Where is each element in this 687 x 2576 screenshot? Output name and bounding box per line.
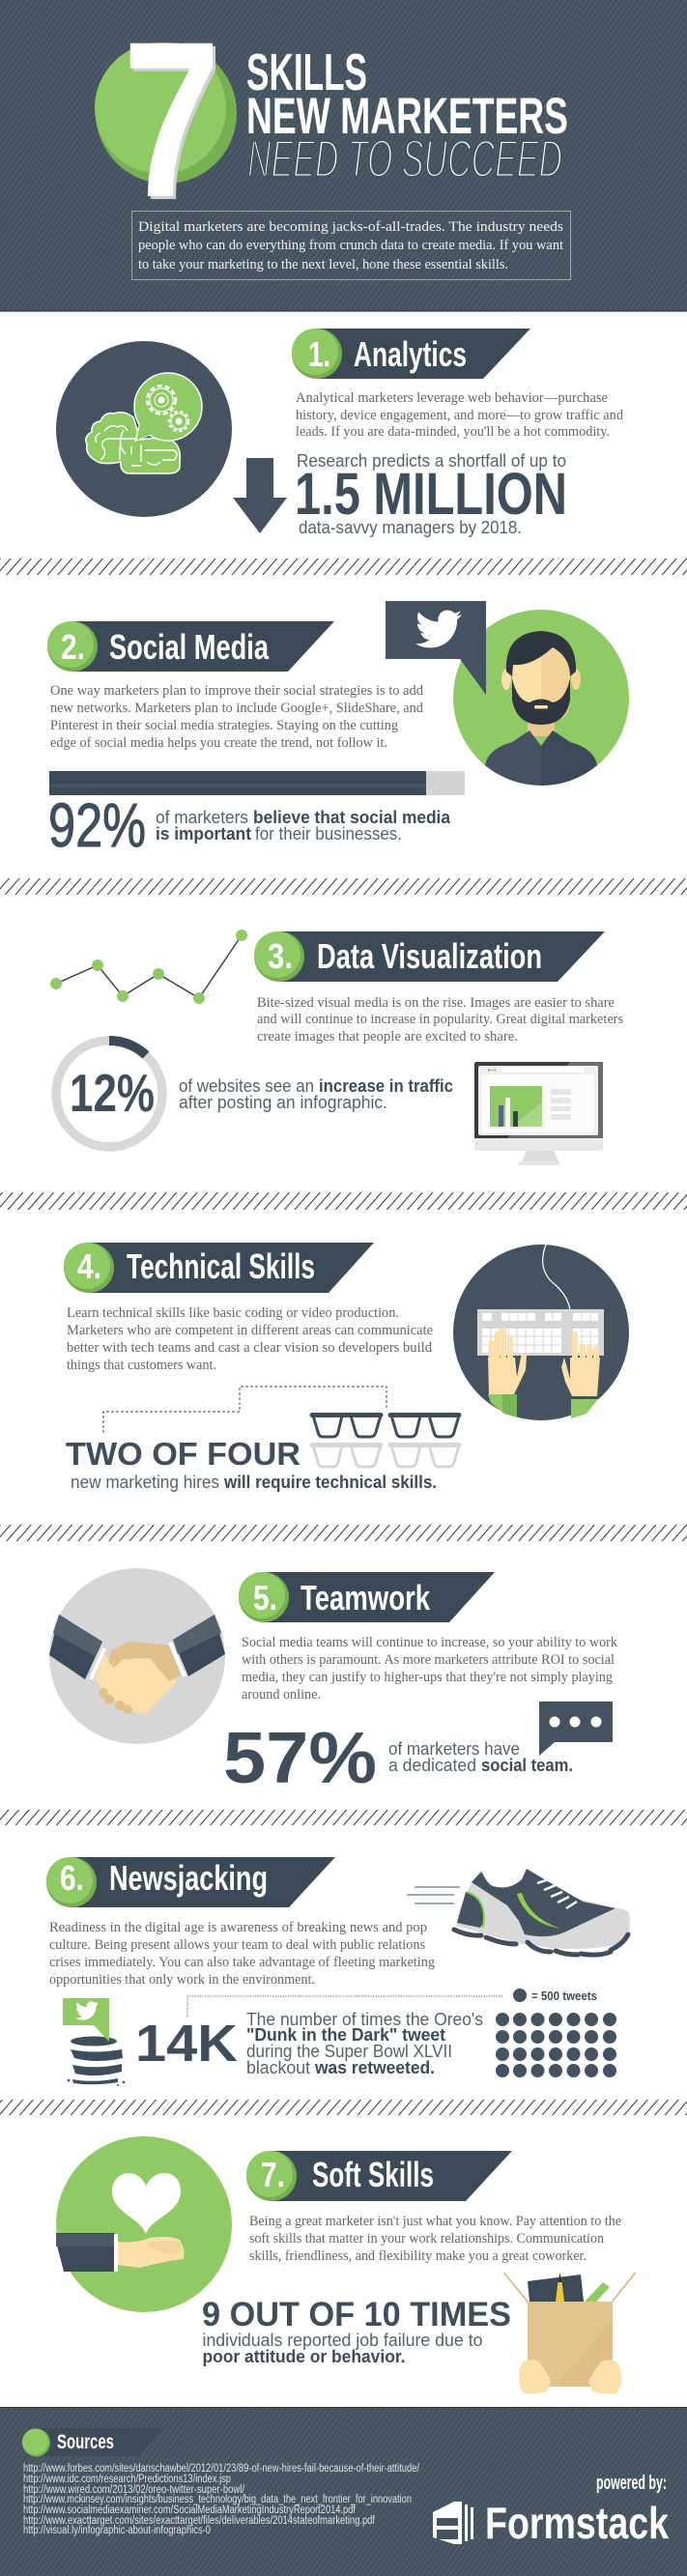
body text: culture. Being present allows your team to deal with public relations	[49, 1937, 425, 1953]
panel: 6 newsjacking	[46, 1857, 630, 2086]
source links: http://www.wired.com/2013/02/oreo-twitter-super-bowl/	[23, 2484, 245, 2496]
intro text box	[131, 211, 570, 280]
stat: 92 percent: believe that social media	[253, 808, 451, 827]
heading banner: newsjacking	[46, 1857, 335, 1907]
panel: 7 soft skills	[56, 2136, 636, 2394]
stat: 14K: blackout	[246, 2058, 310, 2077]
body text: crises immediately. You can also take advantage of fleeting marketing	[49, 1955, 435, 1970]
progress bar 92 percent	[49, 771, 465, 795]
heading banner: data visualization	[254, 931, 605, 982]
body text: new networks. Marketers plan to include Google+, SlideShare, and	[50, 701, 424, 716]
icon: twitter speech bubble	[386, 601, 486, 695]
icon: oreo cookie stack with twitter bubble	[63, 1998, 125, 2086]
body text: Being a great marketer isn't just what you know. Pay attention to the	[249, 2214, 621, 2229]
body text	[249, 2214, 621, 2264]
stat: 92 percent	[48, 790, 451, 860]
stat: 9 out of 10 times	[202, 2296, 511, 2366]
body text: around online.	[242, 1687, 321, 1703]
dotted connector	[187, 1996, 503, 2017]
big numeral seven: 7	[123, 0, 220, 243]
heading banner: social media: 2.	[61, 627, 85, 667]
chart: donut 12 percent	[56, 1041, 162, 1147]
stat text: increase in traffic: increase in traffic	[319, 1076, 453, 1096]
icon: hand holding heart	[56, 2136, 232, 2312]
heading banner: technical skills: Technical Skills	[127, 1246, 315, 1286]
sources heading: Sources	[57, 2431, 114, 2453]
heading banner: analytics	[292, 329, 530, 379]
panel: 3 data visualization	[50, 930, 623, 1165]
panel: 2 social media	[47, 601, 629, 860]
stat text: increase in traffic: of websites see an	[179, 1076, 314, 1096]
stat: 14K: was retweeted.	[314, 2058, 435, 2077]
title: SKILLS	[246, 43, 367, 101]
intro text box: to take your marketing to the next level, hone these essential skills.	[138, 257, 508, 272]
stat: 9 out of 10 times: individuals reported job failure due to	[203, 2331, 483, 2350]
heading banner: technical skills: 4.	[77, 1246, 101, 1286]
panel: header	[0, 0, 687, 312]
stat: 1.5 million: 1.5 MILLION	[295, 461, 567, 527]
stat: 92 percent: for their businesses.	[255, 824, 402, 844]
heading banner: soft skills: 7.	[261, 2155, 285, 2194]
heading banner: teamwork	[239, 1572, 495, 1622]
heading banner: analytics: Analytics	[354, 334, 467, 374]
heading banner: social media: Social Media	[109, 627, 270, 667]
body text: skills, friendliness, and flexibility make you a great coworker.	[249, 2248, 587, 2264]
stat: two of four	[66, 1436, 437, 1492]
body text	[49, 1920, 435, 1988]
heading banner: soft skills: Soft Skills	[312, 2155, 434, 2194]
body text: and will continue to increase in popularity. Great digital marketers	[257, 1012, 623, 1027]
icon: brain with gears	[56, 341, 232, 517]
icon: green circle behind seven	[95, 43, 237, 184]
stat text: increase in traffic: after posting an infographic.	[179, 1093, 387, 1112]
source links: http://visual.ly/infographic-about-infographics-0	[23, 2525, 211, 2536]
body text	[242, 1635, 618, 1703]
dashed connector	[103, 1387, 386, 1433]
heading banner: teamwork: 5.	[253, 1578, 277, 1617]
icon: down arrow	[233, 458, 287, 533]
stat: 57 percent: of marketers have	[388, 1739, 520, 1759]
heading banner: social media	[47, 621, 334, 672]
body text: opportunities that only work in the environment.	[49, 1972, 315, 1988]
panel: 5 teamwork	[49, 1568, 618, 1798]
body text	[296, 390, 624, 440]
body text: media, they can justify to higher-ups that they're not simply playing	[242, 1670, 613, 1685]
body text: Pinterest in their social media strategies. Staying on the cutting	[50, 718, 398, 733]
icon: running shoe	[407, 1869, 630, 1955]
stat: two of four: TWO OF FOUR	[66, 1436, 301, 1472]
body text: create images that people are excited to share.	[257, 1029, 518, 1045]
source links: http://www.idc.com/research/Predictions13/index.jsp	[23, 2474, 231, 2485]
stat: two of four: will require technical skills.	[223, 1473, 437, 1492]
body text: Learn technical skills like basic coding or video production.	[67, 1305, 399, 1321]
body text: Analytical marketers leverage web behavior—purchase	[296, 390, 608, 406]
body text: leads. If you are data-minded, you'll be a hot commodity.	[296, 424, 610, 440]
heading banner: technical skills	[64, 1243, 374, 1293]
stat: 1.5 million: Research predicts a shortfall of up to	[297, 451, 566, 471]
body text: One way marketers plan to improve their social strategies is to add	[50, 683, 424, 699]
body text	[257, 995, 623, 1045]
stat: 92 percent: is important	[156, 824, 251, 844]
body text: Marketers who are competent in different areas can communicate	[67, 1323, 433, 1338]
stat: 9 out of 10 times: poor attitude or behavior.	[203, 2347, 406, 2366]
heading banner: teamwork: Teamwork	[301, 1578, 431, 1617]
chart: line chart icon	[50, 930, 247, 1004]
heading banner: analytics: 1.	[308, 334, 330, 374]
body text: edge of social media helps you create the trend, not follow it.	[50, 735, 387, 751]
source links: http://www.forbes.com/sites/danschawbel/2012/01/23/89-of-new-hires-fail-because-of-their-attitude/	[23, 2463, 420, 2475]
icon: hands on keyboard	[453, 1245, 629, 1420]
stat: 14K: during the Super Bowl XLVII	[246, 2042, 452, 2061]
intro text box: people who can do everything from crunch data to create media. If you want	[138, 238, 563, 253]
body text	[50, 683, 424, 751]
stat: 57 percent: 57%	[223, 1717, 377, 1798]
icon: desktop monitor with chart	[474, 1062, 603, 1165]
stat: 14K: The number of times the Oreo's	[246, 2010, 483, 2029]
icon: box with office supplies	[504, 2273, 636, 2394]
source links: http://www.mckinsey.com/insights/business_technology/big_data_the_next_frontier_for_innovation	[23, 2494, 412, 2505]
chart: tweet dot grid	[496, 2013, 616, 2077]
stat: 14K: 14K	[135, 2015, 238, 2073]
icon: formstack logo	[433, 2502, 473, 2544]
body text: better with tech teams and cast a clear vision so developers build	[67, 1340, 433, 1356]
stat: 14K	[135, 2010, 483, 2077]
body text: Bite-sized visual media is on the rise. Images are easier to share	[257, 995, 615, 1011]
icon: handshake	[49, 1568, 225, 1744]
body text: history, device engagement, and more—to grow traffic and	[296, 408, 624, 423]
body text: soft skills that matter in your work relationships. Communication	[249, 2231, 605, 2247]
panel: 1 analytics	[56, 329, 624, 537]
stat: 57 percent: a dedicated	[388, 1756, 476, 1775]
big numeral seven: 7	[126, 0, 223, 246]
body text: things that customers want.	[67, 1358, 216, 1373]
stat: 92 percent: 92%	[48, 790, 146, 860]
stat: 57 percent	[223, 1717, 573, 1798]
panel: footer	[0, 2407, 687, 2576]
heading banner: data visualization: Data Visualization	[317, 936, 542, 976]
body text: Readiness in the digital age is awareness of breaking news and pop	[49, 1920, 427, 1935]
stat: 1.5 million	[295, 451, 567, 537]
heading banner: newsjacking: Newsjacking	[109, 1858, 268, 1898]
icon: bearded man	[453, 610, 629, 786]
body text: Social media teams will continue to increase, so your ability to work	[242, 1635, 618, 1650]
source links: http://www.socialmediaexaminer.com/SocialMediaMarketingIndustryReport2014.pdf	[23, 2504, 357, 2516]
intro text box: Digital marketers are becoming jacks-of-all-trades. The industry needs	[138, 219, 563, 235]
stat: 57 percent: social team.	[481, 1756, 573, 1775]
sources heading	[22, 2428, 163, 2456]
icon: glasses two of four	[312, 1415, 459, 1467]
heading banner: data visualization: 3.	[268, 936, 293, 976]
stat: 1.5 million: data-savvy managers by 2018.	[299, 518, 522, 537]
legend: 500 tweets: = 500 tweets	[531, 1989, 597, 2003]
title	[246, 43, 568, 188]
icon: chat bubble	[539, 1702, 613, 1756]
heading banner: soft skills	[246, 2151, 512, 2201]
panel: 4 technical skills	[64, 1243, 629, 1492]
body text: with others is paramount. As more marketers attribute ROI to social	[242, 1652, 615, 1668]
stat: 92 percent: of marketers	[156, 808, 248, 827]
source links: http://www.exacttarget.com/sites/exacttarget/files/deliverables/2014stateofmarketing.pdf	[23, 2515, 376, 2527]
stat text: increase in traffic	[179, 1076, 453, 1112]
stat: two of four: new marketing hires	[71, 1473, 219, 1492]
stat: 14K: "Dunk in the Dark" tweet	[246, 2025, 445, 2045]
stat: 9 out of 10 times: 9 OUT OF 10 TIMES	[202, 2296, 511, 2333]
heading banner: newsjacking: 6.	[60, 1858, 84, 1898]
body text	[67, 1305, 433, 1373]
chart: donut 12 percent: 12%	[70, 1063, 155, 1123]
source links	[23, 2463, 420, 2536]
